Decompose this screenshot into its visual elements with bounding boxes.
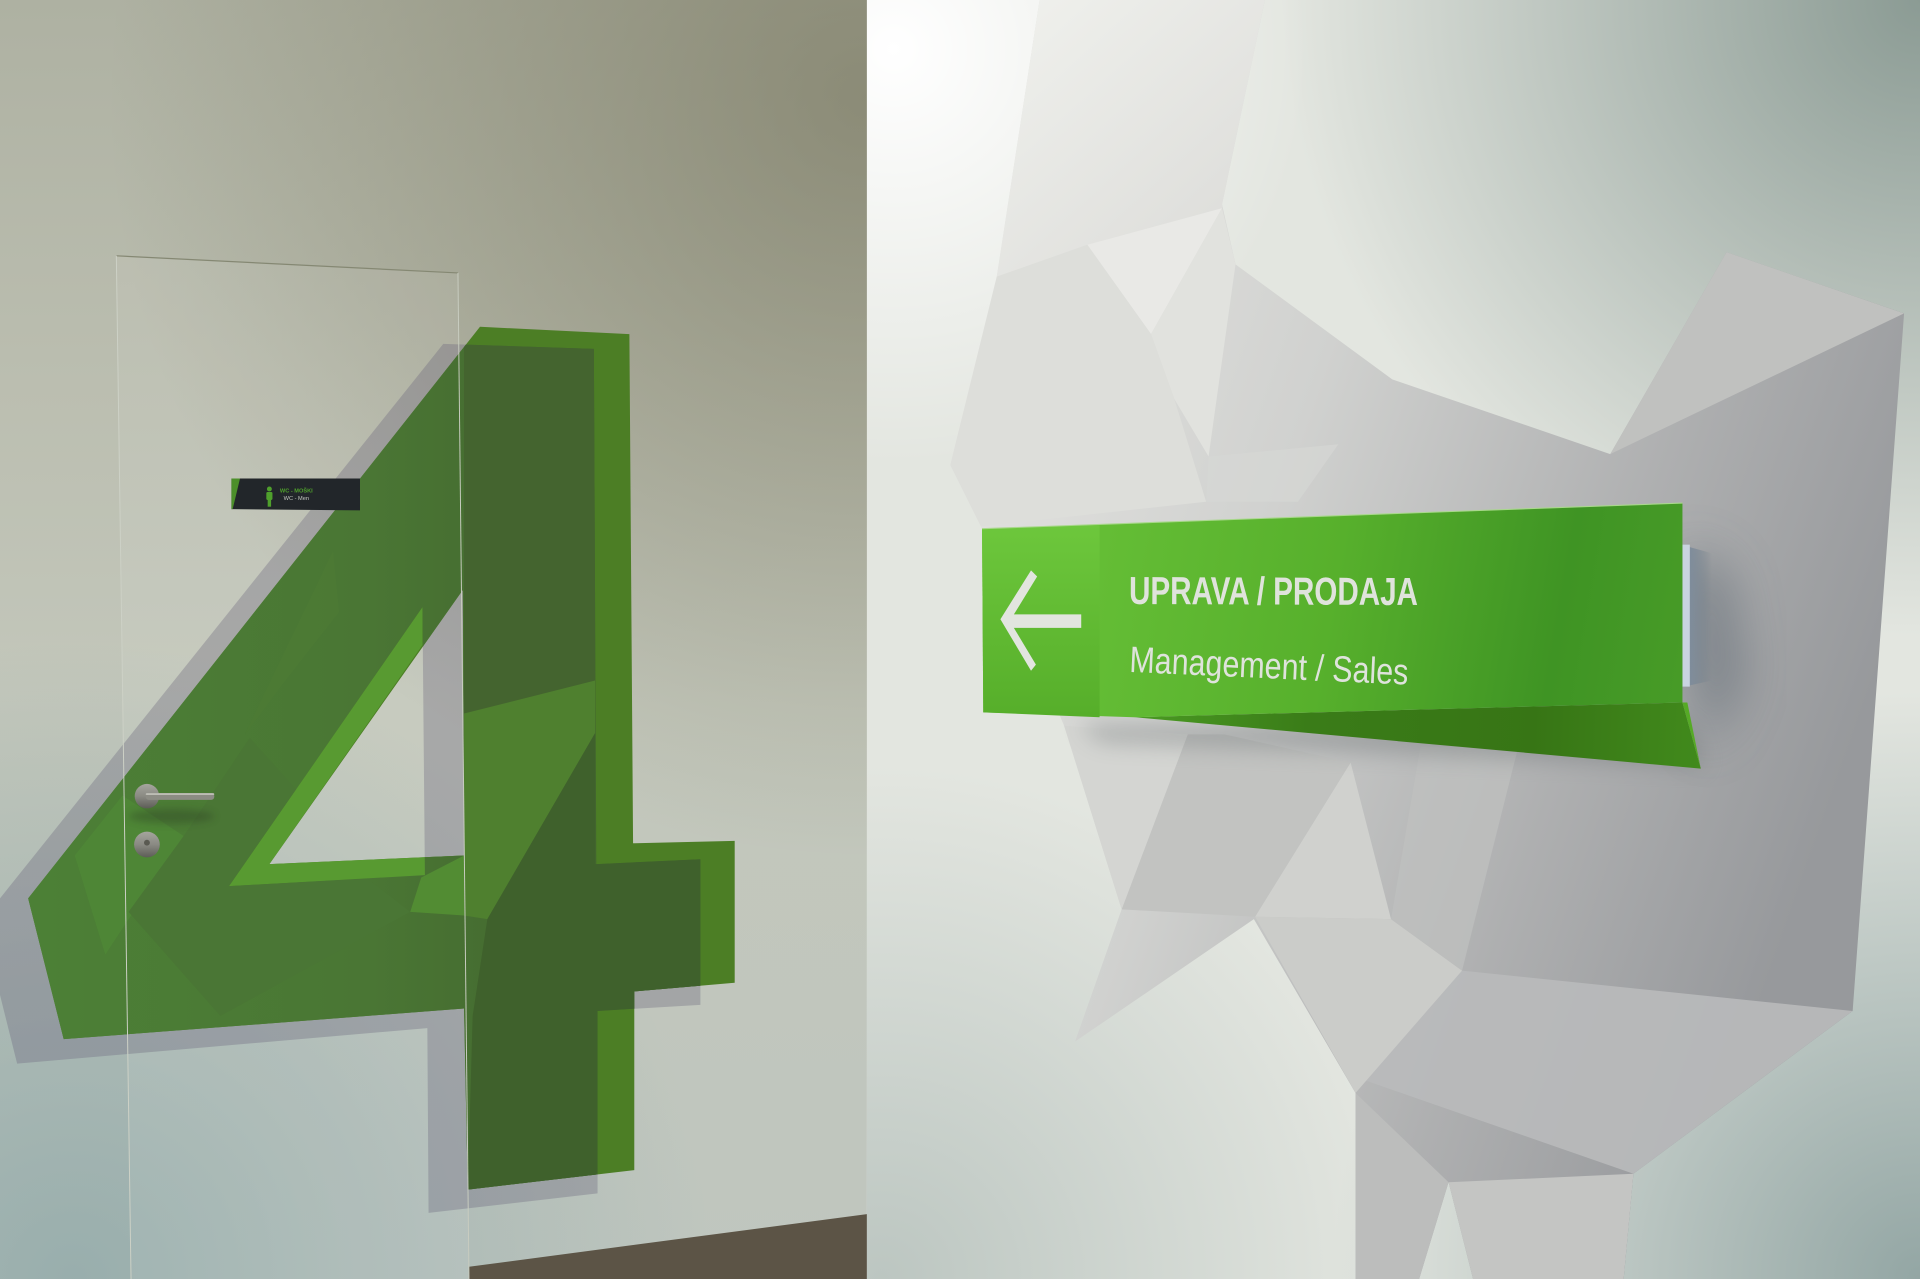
icon: left arrow [1000,570,1081,671]
panel: left photo with door and number 4 [0,0,867,1279]
wall background [0,0,867,1279]
bright inner strip [229,607,464,886]
sign wall mount [1682,545,1712,687]
panel: right photo with directional sign [867,0,1920,1279]
door leaf [116,256,469,1279]
door outline [116,256,469,1279]
sign wing bright edge [1682,703,1701,769]
sign lower folded wing [1134,703,1701,769]
sign shadows [1078,545,1741,766]
door handle [129,784,214,857]
number 4 green [0,318,747,1199]
sign main face [982,503,1682,717]
wall background [867,0,1920,1279]
icon: person [266,487,272,507]
sign heading: UPRAVA / PRODAJA [1129,570,1418,614]
overlap and facets [28,344,700,1190]
door sign: WC men [231,479,360,510]
arrow panel highlight [982,525,1100,717]
sign text: WC - MOŠKI [280,487,313,495]
sign text [280,488,312,500]
low-poly grey wall graphic [950,0,1904,1279]
number 4 shadow [0,344,700,1213]
floor [469,1214,867,1279]
sign subheading: Management / Sales [1129,639,1409,693]
sign text: WC - Men [284,496,309,502]
